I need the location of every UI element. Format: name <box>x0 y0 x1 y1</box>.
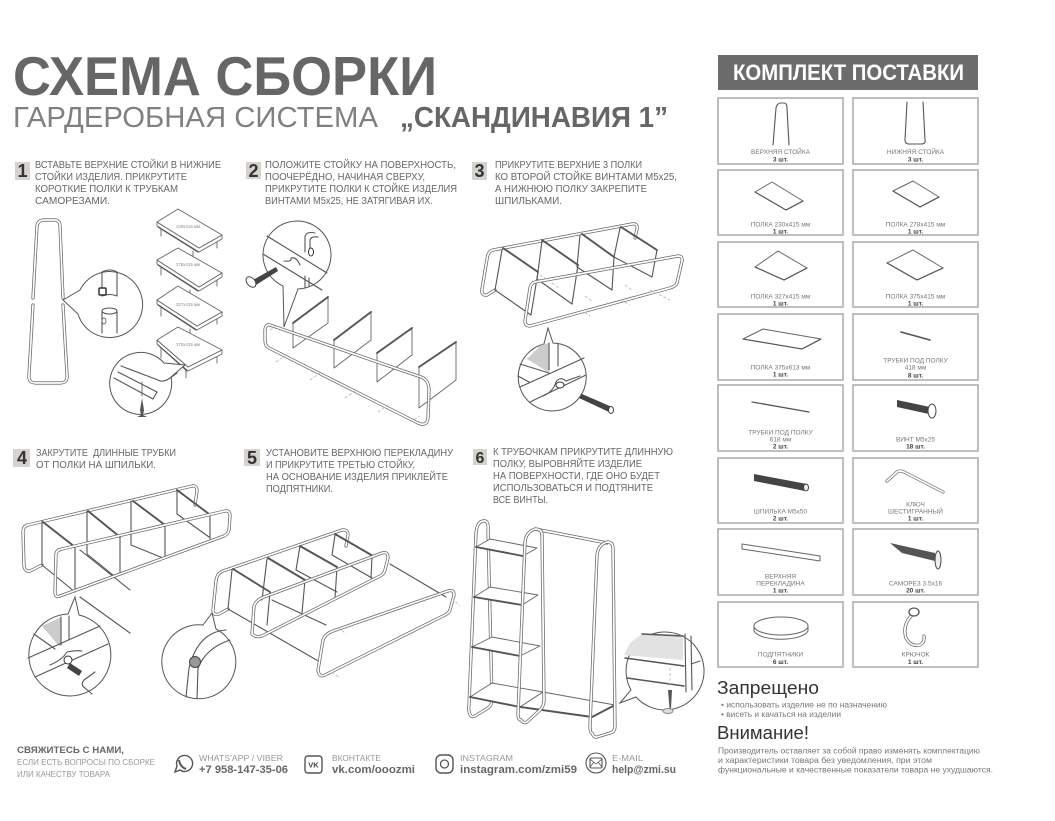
stud <box>579 394 614 414</box>
step 4 text: ЗАКРУТИТЕ ДЛИННЫЕ ТРУБКИ <box>36 448 176 459</box>
card: tube 618: 618 мм <box>770 436 792 444</box>
attention notes: Внимание! <box>717 723 809 743</box>
long frame <box>265 325 429 424</box>
card: hook: КРЮЧОК <box>902 652 930 658</box>
step 1 text: КОРОТКИЕ ПОЛКИ К ТРУБКАМ <box>35 184 178 195</box>
card: tube 618 <box>718 385 843 451</box>
card: shelf 375: ПОЛКА 375x415 мм <box>886 294 946 300</box>
assembled frames with third upright <box>213 530 460 678</box>
contact: email: E-MAIL <box>612 753 643 763</box>
card: tube 618: 2 шт. <box>773 444 788 450</box>
contact: instagram: instagram.com/zmi59 <box>460 764 577 776</box>
card: tube 618: ТРУБКИ ПОД ПОЛКУ <box>748 430 814 436</box>
step 4 number: 4 <box>17 448 27 468</box>
panel: step 4 <box>13 448 230 696</box>
card: hex key <box>853 458 978 523</box>
card: shelf 230 <box>718 170 843 236</box>
card: shelf 278 <box>853 170 978 236</box>
contact: email: help@zmi.su <box>612 764 676 776</box>
step 3 text: КО ВТОРОЙ СТОЙКЕ ВИНТАМИ М5x25, <box>495 171 677 183</box>
step 3 text <box>495 160 677 207</box>
step 2 number: 2 <box>248 161 259 181</box>
assembled clothes rack <box>469 521 615 737</box>
shelf 230x415 <box>157 209 222 258</box>
magnifier: shelf screw <box>110 352 185 417</box>
card: shelf 375: 1 шт. <box>908 300 923 308</box>
step 5 text <box>266 448 454 495</box>
card: shelf 375 <box>853 242 978 308</box>
card: foot pads <box>718 602 843 667</box>
panel: step 6 <box>469 447 704 737</box>
contact: instagram: INSTAGRAM <box>460 753 513 763</box>
card: screw: 18 шт. <box>906 444 925 450</box>
step 5 text: УСТАНОВИТЕ ВЕРХНЮЮ ПЕРЕКЛАДИНУ <box>266 448 454 459</box>
card: shelf 327: 1 шт. <box>773 300 788 308</box>
step 6 text: ИСПОЛЬЗОВАТЬСЯ И ПОДТЯНИТЕ <box>493 483 653 494</box>
card: hex key: 1 шт. <box>908 516 923 522</box>
card: shelf 230: 1 шт. <box>773 228 788 236</box>
step 2 text: ВИНТАМИ М5x25, НЕ ЗАТЯГИВАЯ ИХ. <box>265 196 433 207</box>
card: stud: ШПИЛЬКА М5x50 <box>754 508 808 516</box>
contact: whatsapp: +7 958-147-35-06 <box>199 764 288 776</box>
step 1 number <box>15 161 30 181</box>
card: upper post <box>718 98 843 164</box>
card: long shelf: ПОЛКА 375x613 мм <box>751 364 811 372</box>
shelves on edge <box>293 297 456 408</box>
step 2 text: ПРИКРУТИТЕ ПОЛКИ К СТОЙКЕ ИЗДЕЛИЯ <box>265 183 457 195</box>
footer: contact intro: СВЯЖИТЕСЬ С НАМИ, <box>17 745 124 756</box>
attention notes: и характеристики товара без уведомления, при этом <box>718 756 932 765</box>
shelf 375x415: 375x415 мм <box>176 342 200 347</box>
step 2 text: ПООЧЕРЁДНО, НАЧИНАЯ СВЕРХУ, <box>265 172 425 183</box>
card: stud <box>718 458 843 523</box>
magnifier: base screw <box>620 632 704 714</box>
card: screw <box>853 385 978 451</box>
card: top crossbar <box>718 529 843 595</box>
shelf 230x415: 230x415 мм <box>176 224 200 229</box>
step 4 number <box>13 448 30 468</box>
card: upper post: ВЕРХНЯЯ СТОЙКА <box>751 147 811 156</box>
magnifier: stud <box>518 328 586 411</box>
card: shelf 278: ПОЛКА 278x415 мм <box>886 222 946 228</box>
assembled shelves and frames <box>482 224 682 326</box>
step 6 number: 6 <box>476 450 485 467</box>
card: stud: 2 шт. <box>773 516 788 522</box>
step 6 text: НА ПОВЕРХНОСТИ, ГДЕ ОНО БУДЕТ <box>493 471 660 482</box>
contact: email <box>612 753 676 776</box>
panel: delivery kit <box>718 55 978 667</box>
step 1 number: 1 <box>17 161 28 181</box>
subtitle: ГАРДЕРОБНАЯ СИСТЕМА <box>13 102 379 134</box>
card: long shelf <box>718 314 843 380</box>
attention notes: Производитель оставляет за собой право изменять комплектацию <box>718 746 980 756</box>
card: shelf 230: ПОЛКА 230x415 мм <box>751 222 811 228</box>
step 3 text: ПРИКРУТИТЕ ВЕРХНИЕ 3 ПОЛКИ <box>495 160 642 171</box>
step 6 text <box>493 447 673 506</box>
upright frame <box>29 220 67 383</box>
step 1 text: СТОЙКИ ИЗДЕЛИЯ. ПРИКРУТИТЕ <box>35 171 187 183</box>
panel: step 2 <box>244 159 457 424</box>
card: hex key: КЛЮЧ <box>906 502 925 508</box>
card: hook: 1 шт. <box>908 659 923 666</box>
card: self-tapping screw: 20 шт. <box>906 588 925 594</box>
screw <box>244 267 278 289</box>
magnifier: stud in tube <box>28 597 111 696</box>
step 6 text: ВСЕ ВИНТЫ. <box>493 495 548 506</box>
card: shelf 327: ПОЛКА 327x415 мм <box>751 294 811 300</box>
step 3 number <box>472 161 487 181</box>
step 5 number <box>244 448 260 468</box>
forbidden notes: Запрещено <box>717 678 819 698</box>
card: shelf 327 <box>718 242 843 308</box>
shelf 278x415 <box>157 248 222 297</box>
contact: instagram <box>460 753 577 776</box>
card: hook <box>853 602 978 667</box>
panel: step 3 <box>472 160 682 414</box>
card: tube 418 <box>853 314 978 380</box>
panel: step 1 <box>15 159 222 417</box>
assembled frames with rods <box>23 486 230 633</box>
shelf 375x415 <box>157 327 222 378</box>
step 4 text: ОТ ПОЛКИ НА ШПИЛЬКИ. <box>36 460 156 471</box>
kit header <box>718 55 978 90</box>
card: foot pads: ПОДПЯТНИКИ <box>758 652 803 658</box>
card: upper post: 3 шт. <box>773 156 788 164</box>
footer: contact intro: ЕСЛИ ЕСТЬ ВОПРОСЫ ПО СБОРКЕ <box>17 758 155 767</box>
step 5 text: И ПРИКРУТИТЕ ТРЕТЬЮ СТОЙКУ, <box>266 459 415 471</box>
step 1 text <box>35 159 221 207</box>
subtitle: „СКАНДИНАВИЯ 1” <box>400 102 668 134</box>
icon: instagram <box>436 755 453 773</box>
step 3 text: А НИЖНЮЮ ПОЛКУ ЗАКРЕПИТЕ <box>495 184 647 195</box>
attention notes <box>717 723 993 774</box>
shelf 327x415: 327x415 мм <box>176 302 200 307</box>
card: tube 418: 418 мм <box>905 364 927 372</box>
magnifier: screw hole <box>263 221 331 327</box>
kit header: КОМПЛЕКТ ПОСТАВКИ <box>733 60 964 85</box>
step 1 text: САМОРЕЗАМИ. <box>35 196 110 207</box>
step 2 text: ПОЛОЖИТЕ СТОЙКУ НА ПОВЕРХНОСТЬ, <box>265 159 456 171</box>
card: lower post: НИЖНЯЯ СТОЙКА <box>887 147 945 156</box>
subtitle <box>13 102 668 134</box>
step 5 text: НА ОСНОВАНИЕ ИЗДЕЛИЯ ПРИКЛЕЙТЕ <box>266 471 448 483</box>
card: shelf 278: 1 шт. <box>908 228 923 236</box>
card: tube 418: ТРУБКИ ПОД ПОЛКУ <box>883 358 949 364</box>
panel: step 5 <box>162 448 460 699</box>
step 2 number <box>246 161 261 181</box>
forbidden notes: • висеть и качаться на изделии <box>721 710 841 719</box>
card: lower post <box>853 98 978 164</box>
card: self-tapping screw: САМОРЕЗ 3.5x16 <box>889 580 942 588</box>
forbidden notes: • использовать изделие не по назначению <box>721 700 887 710</box>
contact: whatsapp: WHATS'APP / VIBER <box>199 753 283 763</box>
icon: vk: VK <box>308 760 319 770</box>
card: lower post: 3 шт. <box>908 156 923 164</box>
step 6 number <box>473 449 487 467</box>
card: self-tapping screw <box>853 529 978 595</box>
contact: whatsapp <box>199 753 288 776</box>
magnifier: tube joint <box>63 270 143 338</box>
card: top crossbar: 1 шт. <box>773 588 788 594</box>
card: screw: ВИНТ М5x25 <box>896 436 935 444</box>
step 3 number: 3 <box>474 161 485 181</box>
card: top crossbar: ВЕРХНЯЯ <box>765 574 796 580</box>
icon: email <box>586 753 606 773</box>
step 1 text: ВСТАВЬТЕ ВЕРХНИЕ СТОЙКИ В НИЖНИЕ <box>35 159 221 171</box>
title: СХЕМА СБОРКИ <box>13 45 437 107</box>
step 3 text: ШПИЛЬКАМИ. <box>495 196 562 207</box>
magnifier: foot pad <box>162 613 236 699</box>
contact: vk: ВКОНТАКТЕ <box>332 753 381 763</box>
contact: vk <box>332 753 415 776</box>
card: long shelf: 1 шт. <box>773 372 788 378</box>
step 6 text: ПОЛКУ, ВЫРОВНЯЙТЕ ИЗДЕЛИЕ <box>493 458 642 470</box>
attention notes: функциональные и качественные показатели товара не ухудшаются. <box>718 766 993 774</box>
footer: contact intro: ИЛИ КАЧЕСТВУ ТОВАРА <box>17 770 111 779</box>
card: tube 418: 8 шт. <box>908 372 923 380</box>
step 4 text <box>36 448 176 471</box>
card: hex key: ШЕСТИГРАННЫЙ <box>888 506 943 516</box>
card: foot pads: 6 шт. <box>773 659 788 666</box>
shelf 327x415 <box>157 286 222 335</box>
step 2 text <box>265 159 457 207</box>
shelf 278x415: 278x415 мм <box>176 262 200 267</box>
forbidden notes <box>717 678 887 719</box>
step 5 number: 5 <box>247 448 257 468</box>
icon: vk <box>305 756 322 773</box>
icon: whatsapp <box>175 755 193 772</box>
contact: vk: vk.com/ooozmi <box>332 764 415 776</box>
footer: contact intro <box>17 745 155 779</box>
step 5 text: ПОДПЯТНИКИ. <box>266 484 333 495</box>
step 6 text: К ТРУБОЧКАМ ПРИКРУТИТЕ ДЛИННУЮ <box>493 447 673 458</box>
card: top crossbar: ПЕРЕКЛАДИНА <box>756 580 805 588</box>
